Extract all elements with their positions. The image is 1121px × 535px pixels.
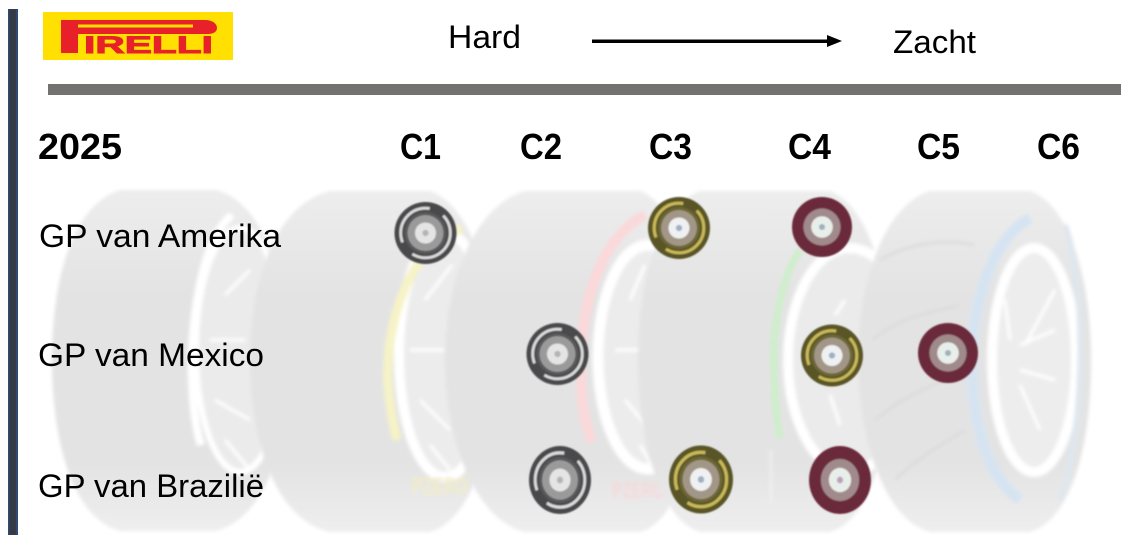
row label: GP van Amerika: GP van Amerika — [39, 218, 281, 254]
header: Zacht: Zacht — [893, 24, 976, 60]
grey divider bar — [48, 84, 1121, 95]
tyre: red compound: PZERO — [612, 478, 664, 503]
tyre: green intermediate — [638, 191, 912, 532]
icon: soft tyre, GP van Amerika, C4 — [792, 197, 852, 257]
icon: medium tyre, GP van Mexico, C4 — [801, 324, 863, 386]
column header: 2025: 2025 — [38, 126, 122, 167]
row label: GP van Brazilië: GP van Brazilië — [38, 468, 264, 504]
tyre: yellow compound — [250, 191, 495, 532]
column header: C3: C3 — [649, 126, 692, 167]
icon: soft tyre, GP van Brazilië, C4 — [809, 446, 871, 514]
column header: C5: C5 — [917, 126, 960, 167]
icon: hard tyre, GP van Brazilië, C2 — [529, 446, 591, 514]
icon: soft tyre, GP van Mexico, C5 — [918, 323, 978, 383]
icon: medium tyre, GP van Amerika, C3 — [648, 197, 710, 259]
row label: GP van Mexico: GP van Mexico — [38, 337, 264, 373]
tyre: red compound — [445, 191, 698, 532]
column header: C6: C6 — [1037, 126, 1080, 167]
Pirelli logo: IRELLI — [84, 32, 213, 59]
icon: medium tyre, GP van Brazilië, C3 — [669, 446, 733, 514]
background tyres — [52, 190, 1091, 532]
column header: C4: C4 — [788, 126, 831, 167]
arrow: hard to soft — [592, 35, 842, 47]
column header: C2: C2 — [520, 126, 562, 167]
header: Hard: Hard — [448, 19, 521, 55]
Pirelli logo — [43, 12, 233, 60]
column header: C1: C1 — [400, 126, 441, 167]
tyre: yellow compound: PZERO — [412, 473, 468, 500]
icon: hard tyre, GP van Mexico, C2 — [526, 323, 588, 385]
tyre: white compound — [52, 190, 290, 531]
left vertical bar — [8, 9, 18, 535]
icon: hard tyre, GP van Amerika, C1 — [394, 202, 456, 264]
tyre: blue wet — [858, 191, 1091, 532]
